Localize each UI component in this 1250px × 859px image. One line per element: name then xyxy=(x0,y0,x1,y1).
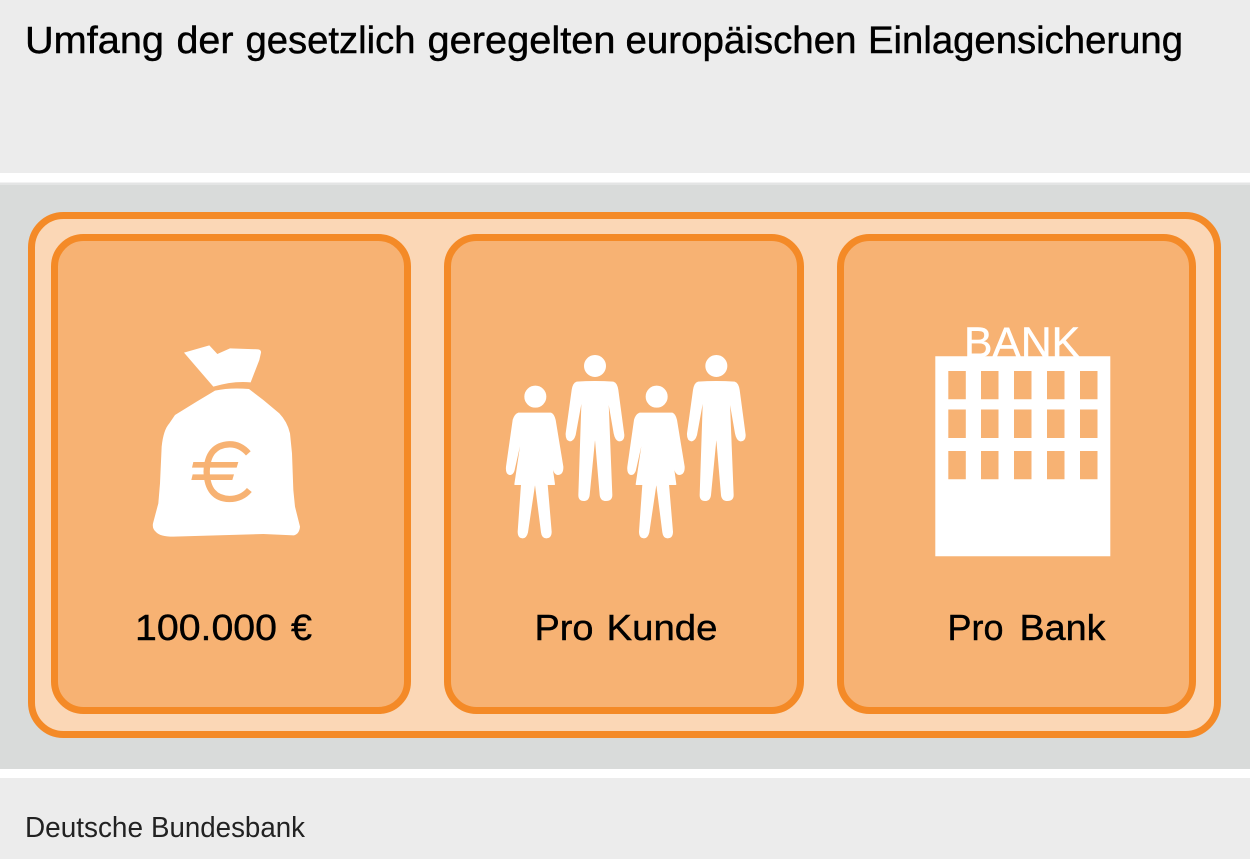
icon: bank building xyxy=(935,319,1110,556)
source note xyxy=(25,812,305,844)
label: Pro Bank: Pro xyxy=(948,607,1004,648)
title: Umfang xyxy=(25,20,164,62)
panel: amount xyxy=(54,238,408,710)
title: Einlagensicherung xyxy=(868,20,1183,62)
title: geregelten xyxy=(428,20,616,62)
label: Pro Kunde: Kunde xyxy=(606,607,718,648)
source note: Bundesbank xyxy=(151,812,305,844)
footer band xyxy=(0,778,1250,859)
title xyxy=(25,20,1183,62)
source note: Deutsche xyxy=(25,812,143,844)
main grey panel xyxy=(0,182,1250,769)
header band xyxy=(0,0,1250,173)
panel: per bank xyxy=(840,238,1192,710)
outer deposit guarantee frame xyxy=(32,216,1218,734)
label: 100.000 €: 100.000 xyxy=(135,607,277,648)
title: der xyxy=(176,20,234,62)
label: Pro Kunde: Pro xyxy=(534,607,594,648)
panel box: per customer xyxy=(448,238,800,710)
label: Pro Bank: Bank xyxy=(1020,607,1107,648)
label: 100.000 €: € xyxy=(291,607,312,648)
icon text: BANK sign: BANK xyxy=(964,319,1080,367)
panel: per customer xyxy=(448,238,800,710)
icon: four people xyxy=(507,356,745,538)
title: gesetzlich xyxy=(246,20,416,62)
panel box: amount xyxy=(54,238,408,710)
panel box: per bank xyxy=(840,238,1192,710)
icon: money bag with euro sign xyxy=(153,345,300,537)
label: Pro Kunde xyxy=(534,607,718,648)
title: europäischen xyxy=(626,20,856,62)
label: Pro Bank xyxy=(948,607,1107,648)
